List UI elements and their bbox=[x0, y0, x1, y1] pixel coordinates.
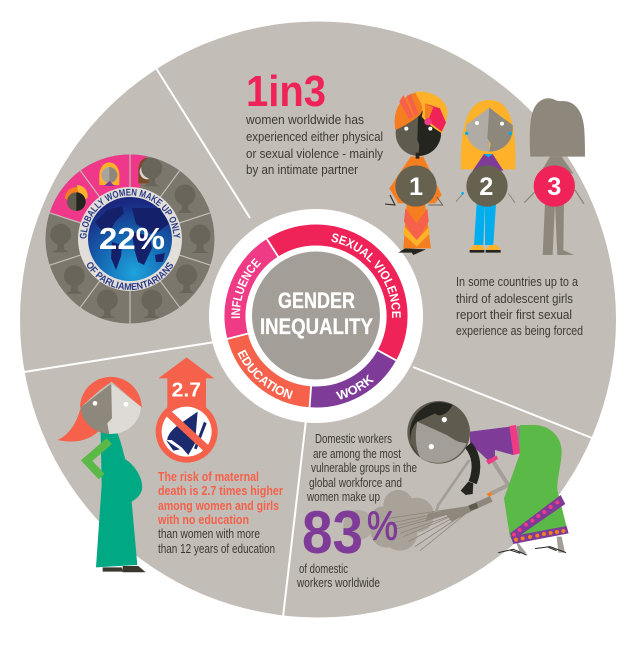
text block: adolescent girls bbox=[456, 275, 583, 338]
number 2: 2 bbox=[479, 173, 493, 201]
figure: woman 3 silhouette bbox=[524, 98, 585, 255]
text block: adolescent girls: third of adolescent girls bbox=[456, 292, 573, 306]
text block: domestic workers: women make up bbox=[306, 490, 380, 504]
text block: of domestic workers worldwide: of domestic bbox=[299, 562, 348, 576]
text block: maternal risk: with no education bbox=[157, 513, 249, 527]
text block: maternal risk bbox=[157, 470, 283, 556]
panel: influence, parliamentarians wheel bbox=[46, 154, 214, 324]
text block: of domestic workers worldwide: workers worldwide bbox=[296, 576, 380, 590]
icon: woman with turban bbox=[65, 185, 88, 211]
text block: maternal risk: among women and girls bbox=[158, 499, 279, 513]
figure: woman 2 blonde bbox=[456, 100, 515, 253]
text block: maternal risk: The risk of maternal bbox=[158, 470, 259, 484]
label: influence: INFLUENCE bbox=[231, 258, 261, 318]
label: education: EDUCATION bbox=[238, 350, 293, 400]
braid bbox=[468, 445, 476, 483]
heading: 1in3: 1in3 bbox=[246, 67, 326, 116]
value 2.7: 2.7 bbox=[172, 380, 201, 402]
text block: adolescent girls: experience as being forced bbox=[456, 324, 583, 338]
ring segment: sexual violence bbox=[272, 235, 397, 355]
text block: maternal risk: than women with more bbox=[158, 527, 260, 541]
ring segment: influence bbox=[235, 248, 272, 336]
stat: 83%: 83 bbox=[302, 499, 363, 566]
number 1: 1 bbox=[409, 173, 423, 201]
title: INEQUALITY bbox=[260, 314, 373, 339]
stat: 22%: 22% bbox=[99, 221, 165, 256]
text block: adolescent girls: In some countries up to a bbox=[456, 275, 578, 289]
text block: violence: women worldwide has bbox=[245, 113, 364, 127]
globe continents bbox=[95, 206, 169, 270]
arms bbox=[436, 460, 469, 512]
ring segment: work bbox=[310, 355, 387, 397]
segment divider lines bbox=[24, 68, 592, 617]
figure: pregnant woman bbox=[57, 377, 146, 572]
stat: 83%: % bbox=[367, 503, 398, 549]
text block: domestic workers: vulnerable groups in the bbox=[311, 461, 417, 475]
number 3: 3 bbox=[547, 173, 561, 201]
text block: domestic workers: global workforce and bbox=[309, 476, 402, 490]
text block: domestic workers: are among the most bbox=[313, 447, 401, 461]
ring segment: education bbox=[238, 336, 310, 397]
label: sexual violence: SEXUAL VIOLENCE bbox=[331, 234, 401, 318]
stat: 83% bbox=[302, 499, 398, 566]
centre disc bbox=[252, 252, 380, 380]
label: work: WORK bbox=[336, 374, 374, 400]
text block: domestic workers bbox=[306, 432, 417, 504]
legs and shoes bbox=[513, 537, 565, 553]
text block: violence: or sexual violence - mainly bbox=[246, 147, 384, 161]
curved label top: GLOBALLY WOMEN MAKE UP ONLY bbox=[80, 188, 180, 238]
figure: woman 1 in turban bbox=[385, 92, 447, 255]
head silhouettes bbox=[50, 158, 211, 318]
text block: adolescent girls: report their first sexual bbox=[456, 308, 572, 322]
dust cloud bbox=[343, 490, 434, 551]
dress belts bbox=[510, 495, 565, 540]
text block: domestic workers: Domestic workers bbox=[315, 432, 392, 446]
title bbox=[260, 288, 373, 339]
text block: maternal risk: death is 2.7 times higher bbox=[158, 484, 283, 498]
globe bbox=[88, 197, 172, 281]
figure: domestic worker sweeping bbox=[343, 401, 569, 555]
icon: dark haired woman bbox=[138, 158, 155, 183]
icon: education arrow with crossed mortarboard bbox=[156, 357, 218, 463]
text block: violence: by an intimate partner bbox=[246, 163, 358, 177]
curved label bottom: OF PARLIAMENTARIANS bbox=[86, 262, 173, 290]
text block: of domestic workers worldwide bbox=[296, 562, 380, 590]
broom bbox=[388, 490, 495, 551]
blouse bbox=[470, 427, 517, 461]
text block: violence: experienced either physical bbox=[246, 130, 383, 144]
text block: maternal risk: than 12 years of education bbox=[158, 542, 275, 556]
title: GENDER bbox=[278, 288, 355, 313]
icon: mortarboard bbox=[166, 412, 207, 455]
icon: blonde woman bbox=[99, 162, 119, 186]
head bbox=[407, 401, 470, 464]
text block: violence bbox=[245, 113, 384, 177]
centre hub bbox=[209, 209, 423, 423]
dress bbox=[504, 425, 568, 537]
